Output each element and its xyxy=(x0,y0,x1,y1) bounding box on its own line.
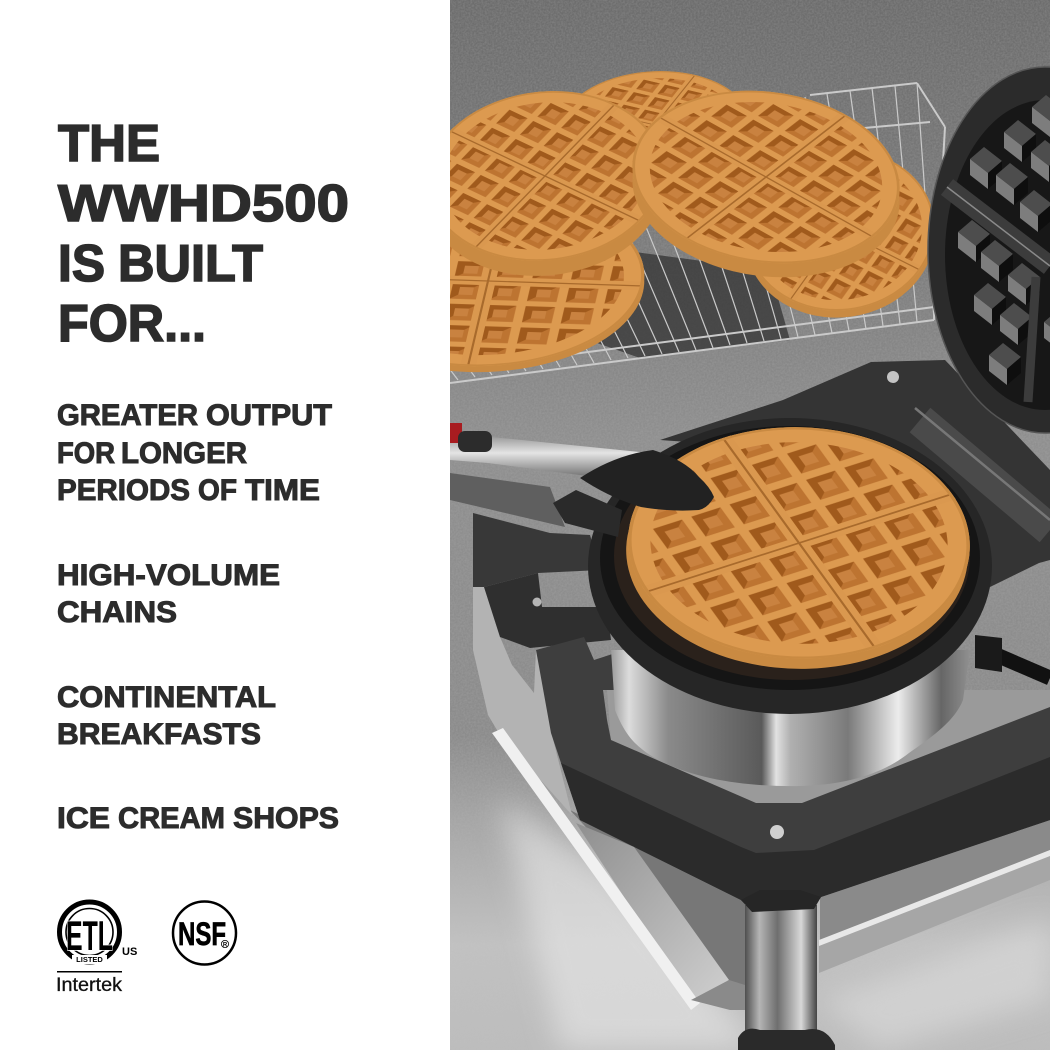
icon: NSF mark: R xyxy=(223,942,228,948)
steel leg xyxy=(738,890,835,1050)
power cord xyxy=(975,635,1050,678)
text block: greater output: GREATER xyxy=(57,399,198,432)
icon: ETL listed Intertek mark: ETL xyxy=(66,912,113,959)
text block: greater output: OUTPUT xyxy=(206,399,332,432)
waffle: front of pile xyxy=(632,90,900,278)
shadow under the waffles xyxy=(598,252,790,358)
waffle: upper left xyxy=(450,91,650,276)
text block: continental breakfasts xyxy=(57,681,276,751)
text block: greater output: TIME xyxy=(245,474,320,507)
cast iron ring xyxy=(588,418,992,714)
text block: ice cream shops xyxy=(57,802,339,835)
icon: NSF mark: NSF xyxy=(178,916,226,952)
waffle: lower left xyxy=(450,243,644,372)
text block: ice cream shops: CREAM xyxy=(118,802,225,835)
icon: ETL listed Intertek mark: US xyxy=(122,946,137,958)
text block: greater output: LONGER xyxy=(121,437,247,470)
heading: the WWHD500 is built for: BUILT xyxy=(118,235,263,293)
steel support rails xyxy=(492,728,1050,1010)
heading: the WWHD500 is built for: IS xyxy=(58,235,105,293)
icon: ETL listed Intertek mark: Intertek xyxy=(56,975,123,996)
text block: continental breakfasts: CONTINENTAL xyxy=(57,681,276,714)
waffle: back centre xyxy=(582,71,732,128)
counter surface xyxy=(450,0,1050,1050)
tongs xyxy=(450,423,714,537)
waffle: back right xyxy=(755,162,931,318)
text block: high-volume chains: CHAINS xyxy=(57,596,177,629)
text block: greater output: PERIODS xyxy=(57,474,190,507)
waffle: main, in the iron xyxy=(626,427,970,669)
panel: white text column xyxy=(0,0,450,1050)
text block: high-volume chains xyxy=(57,559,280,629)
heading: the WWHD500 is built for: FOR... xyxy=(58,295,206,353)
wire cooling rack xyxy=(450,82,946,384)
text block: greater output: FOR xyxy=(57,437,115,470)
panel: product photo xyxy=(450,0,1050,1050)
text block: ice cream shops: SHOPS xyxy=(233,802,339,835)
icon: ETL listed Intertek mark: LISTED xyxy=(76,955,103,964)
text block: ice cream shops: ICE xyxy=(57,802,110,835)
waffle iron lid xyxy=(928,67,1050,433)
heading: the WWHD500 is built for: WWHD500 xyxy=(58,175,349,233)
icon: ETL listed Intertek mark xyxy=(56,902,137,996)
text block: greater output xyxy=(57,399,332,507)
steel drum xyxy=(611,650,970,786)
icon: NSF mark xyxy=(173,902,236,964)
text block: greater output: OF xyxy=(198,474,237,507)
heading: the WWHD500 is built for xyxy=(58,115,349,353)
base frame xyxy=(473,360,1050,910)
heading: the WWHD500 is built for: THE xyxy=(58,115,160,173)
text block: high-volume chains: HIGH-VOLUME xyxy=(57,559,280,592)
text block: continental breakfasts: BREAKFASTS xyxy=(57,718,261,751)
